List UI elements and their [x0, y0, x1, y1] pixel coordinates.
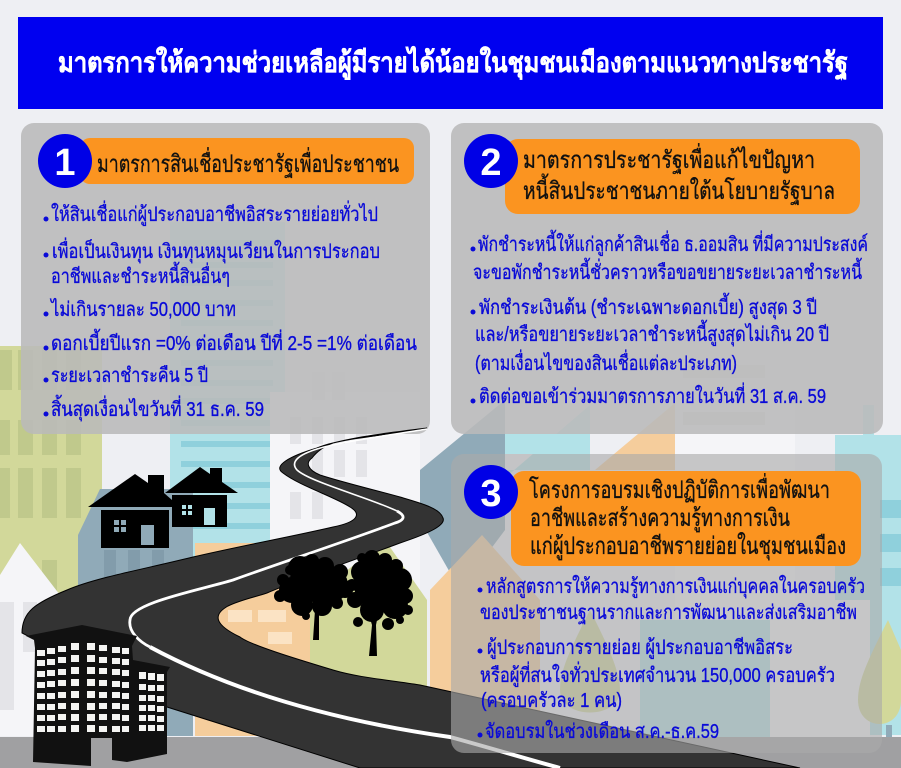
heading: measure 3: 3	[480, 473, 502, 515]
heading: measure 2	[464, 134, 860, 214]
text block: measure 3 details: (ครอบครัวละ 1 คน)	[481, 690, 622, 712]
text block: measure 1 details: ไม่เกินรายละ 50,000 บาท	[49, 298, 236, 321]
heading: measure 1	[38, 134, 414, 188]
panel: measure 2 background	[451, 123, 883, 434]
panel: measure 1 background	[21, 123, 430, 434]
text block: measure 2 details	[470, 230, 868, 408]
text block: measure 2 details: และ/หรือขยายระยะเวลาชำระหนี้สูงสุดไม่เกิน 20 ปี	[475, 320, 829, 347]
heading: measure 3: อาชีพและสร้างความรู้ทางการเงิน	[530, 505, 790, 533]
text block: measure 1 details: อาชีพและชำระหนี้สินอื่นๆ	[51, 262, 230, 288]
text block: measure 3 details: ผู้ประกอบการรายย่อย ผู้ประกอบอาชีพอิสระ	[487, 637, 793, 660]
icon: small house	[165, 467, 238, 527]
background cityscape	[0, 222, 901, 768]
text block: measure 2 details: พักชำระเงินต้น (ชำระเฉพาะดอกเบี้ย) สูงสุด 3 ปี	[479, 293, 817, 320]
heading: measure 1: มาตรการสินเชื่อประชารัฐเพื่อประชาชน	[97, 147, 399, 178]
text block: measure 1 details	[44, 200, 417, 422]
icon: office building	[26, 625, 170, 766]
text block: measure 1 details: สิ้นสุดเงื่อนไขวันที่ 31 ธ.ค. 59	[51, 395, 264, 422]
text block: measure 2 details: (ตามเงื่อนไขของสินเชื่อแต่ละประเภท)	[475, 349, 737, 375]
text block: measure 3 details: จัดอบรมในช่วงเดือน ส.ค.-ธ.ค.59	[485, 720, 719, 743]
text block: measure 1 details: ระยะเวลาชำระคืน 5 ปี	[51, 365, 208, 387]
text block: measure 3 details: หรือผู้ที่สนใจทั่วประเทศจำนวน 150,000 ครอบครัว	[480, 661, 835, 688]
text block: measure 1 details: เพื่อเป็นเงินทุน เงินทุนหมุนเวียนในการประกอบ	[52, 237, 380, 264]
road	[22, 428, 800, 768]
text block: measure 3 details	[478, 575, 865, 743]
icon: trees	[274, 550, 413, 656]
icon: large house	[88, 474, 180, 548]
heading: measure 3	[464, 465, 861, 566]
text block: measure 1 details: ดอกเบี้ยปีแรก =0% ต่อเดือน ปีที่ 2-5 =1% ต่อเดือน	[51, 329, 417, 355]
heading: measure 2: มาตรการประชารัฐเพื่อแก้ไขปัญหา	[523, 143, 815, 174]
panel: measure 3 background	[451, 454, 882, 753]
text block: measure 1 details: ให้สินเชื่อแก่ผู้ประกอบอาชีพอิสระรายย่อยทั่วไป	[51, 200, 378, 227]
text block: measure 2 details: ติดต่อขอเข้าร่วมมาตรการภายในวันที่ 31 ส.ค. 59	[479, 382, 826, 408]
heading: measure 1: 1	[54, 142, 76, 184]
title banner	[18, 17, 883, 109]
heading: measure 2: 2	[480, 142, 502, 184]
